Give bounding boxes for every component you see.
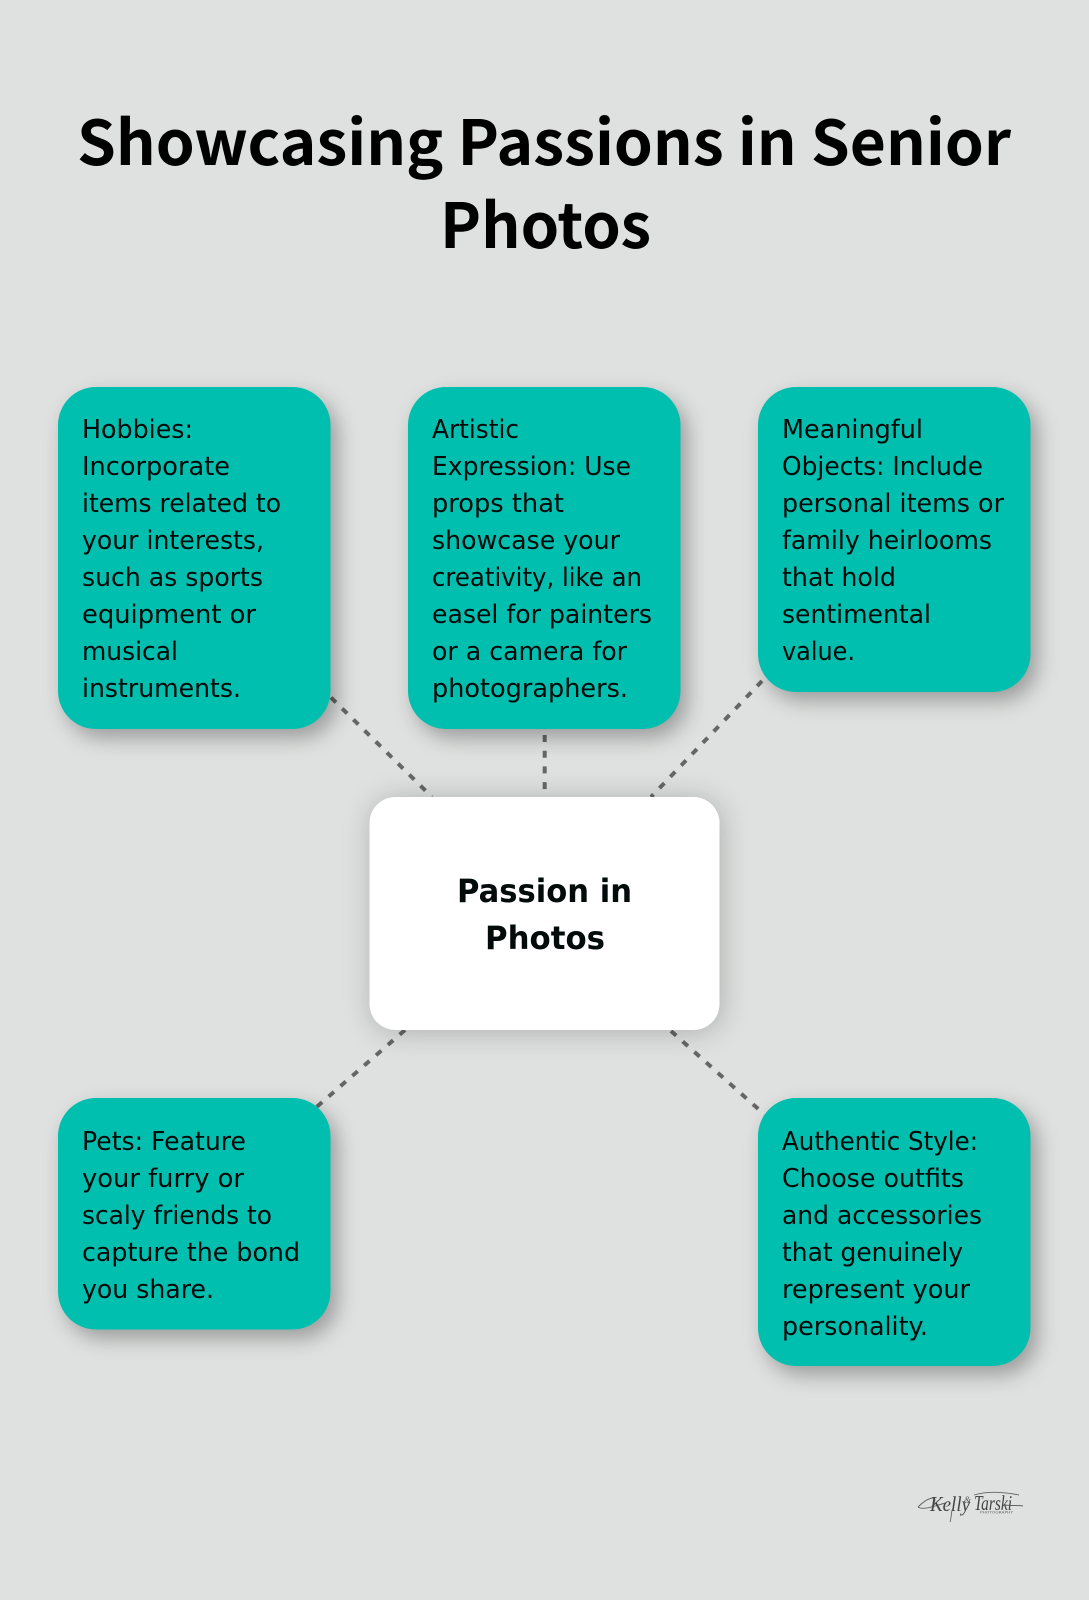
- text: artistic expression: easel for painters: [432, 600, 652, 630]
- title: [77, 93, 1012, 266]
- text: authentic style: that genuinely: [782, 1238, 963, 1268]
- panel: meaningful objects: [758, 387, 1030, 692]
- text: authentic style: personality.: [782, 1312, 928, 1342]
- text: meaningful objects: family heirlooms: [782, 526, 992, 556]
- text: pets: capture the bond: [82, 1238, 300, 1268]
- text: hobbies: your interests,: [82, 526, 264, 556]
- text: passion in photos: Photos: [485, 919, 605, 957]
- text: meaningful objects: sentimental: [782, 600, 931, 630]
- text: hobbies: such as sports: [82, 563, 263, 593]
- text: artistic expression: showcase your: [432, 526, 620, 556]
- connector: meaningful objects to center: [651, 681, 762, 797]
- connector: pets to center: [316, 1030, 405, 1108]
- logo: signature: Tarski: [974, 1491, 1012, 1515]
- panel: artistic expression: [408, 387, 680, 729]
- connector: authentic style to center: [671, 1031, 765, 1115]
- logo: signature: Kelly: [929, 1492, 971, 1516]
- text: artistic expression: creativity, like an: [432, 563, 642, 593]
- text: hobbies: [82, 415, 281, 704]
- text: authentic style: Choose outfits: [782, 1164, 964, 1194]
- text: hobbies: Incorporate: [82, 452, 230, 482]
- text: hobbies: equipment or: [82, 600, 256, 630]
- text: authentic style: represent your: [782, 1275, 970, 1305]
- text: artistic expression: Expression: Use: [432, 452, 631, 482]
- text: hobbies: instruments.: [82, 674, 241, 704]
- panel: center passion in photos: [370, 797, 720, 1030]
- text: pets: your furry or: [82, 1164, 244, 1194]
- text: meaningful objects: Meaningful: [782, 415, 923, 445]
- text: authentic style: [782, 1127, 982, 1342]
- text: passion in photos: Passion in: [457, 872, 632, 910]
- panel: pets: [58, 1098, 330, 1330]
- panel: hobbies: [58, 387, 330, 729]
- text: meaningful objects: personal items or: [782, 489, 1004, 519]
- text: hobbies: Hobbies:: [82, 415, 193, 445]
- text: artistic expression: props that: [432, 489, 564, 519]
- text: artistic expression: [432, 415, 652, 704]
- connector: hobbies to center: [331, 698, 432, 797]
- text: authentic style: and accessories: [782, 1201, 982, 1231]
- text: pets: Pets: Feature: [82, 1127, 246, 1157]
- text: pets: you share.: [82, 1275, 214, 1305]
- text: artistic expression: or a camera for: [432, 637, 627, 667]
- connector: artistic expression to center: [543, 735, 547, 797]
- text: meaningful objects: Objects: Include: [782, 452, 983, 482]
- logo: signature: PHOTOGRAPHY: [980, 1510, 1014, 1514]
- title: Photos: [440, 176, 651, 266]
- text: pets: [82, 1127, 300, 1305]
- text: passion in photos: [457, 872, 632, 957]
- text: meaningful objects: [782, 415, 1004, 667]
- text: hobbies: musical: [82, 637, 178, 667]
- title: Showcasing Passions in Senior: [77, 93, 1012, 183]
- text: artistic expression: photographers.: [432, 674, 628, 704]
- text: hobbies: items related to: [82, 489, 281, 519]
- text: authentic style: Authentic Style:: [782, 1127, 978, 1157]
- text: meaningful objects: value.: [782, 637, 855, 667]
- text: meaningful objects: that hold: [782, 563, 896, 593]
- logo: signature: [918, 1491, 1023, 1522]
- panel: authentic style: [758, 1098, 1030, 1366]
- text: pets: scaly friends to: [82, 1201, 272, 1231]
- text: artistic expression: Artistic: [432, 415, 519, 445]
- logo: signature: &: [964, 1495, 971, 1505]
